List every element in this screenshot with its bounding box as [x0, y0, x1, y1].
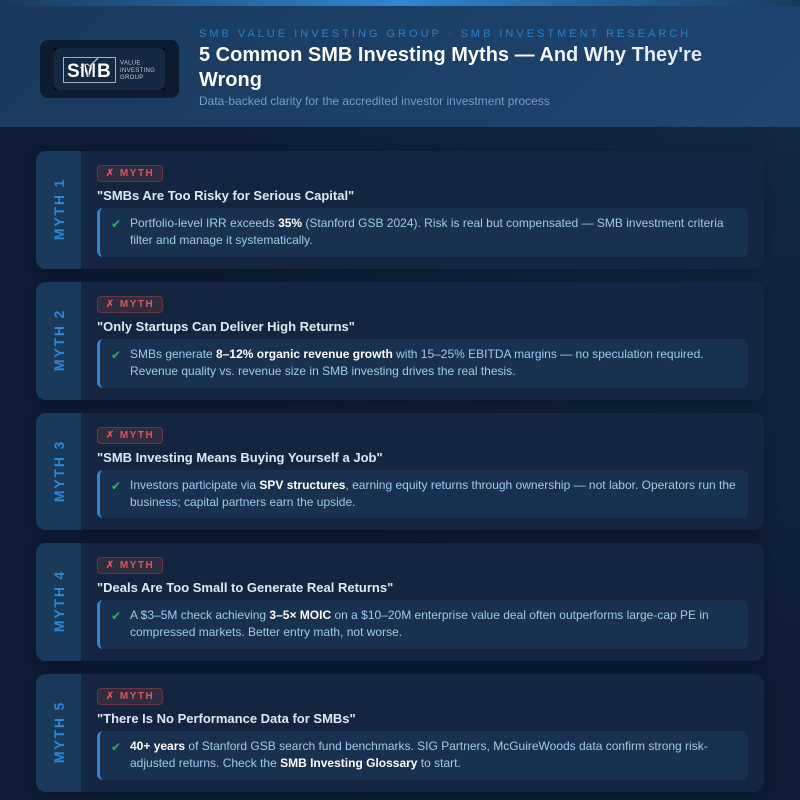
myth 4 rebuttal: ✔ [111, 609, 121, 623]
myth 3 rebuttal: ✔ [111, 479, 121, 493]
myth 1 rebuttal: Portfolio-level IRR exceeds 35% (Stanford GSB 2024). Risk is real but compensated — SMB investment criteria filter and manage it systematically. [130, 216, 724, 247]
myth 2 rebuttal: SMBs generate 8–12% organic revenue growth with 15–25% EBITDA margins — no speculation required. Revenue quality vs. revenue size in SMB investing drives the real thesis. [130, 347, 704, 378]
myth 3 rebuttal: Investors participate via SPV structures, earning equity returns through ownership — not labor. Operators run the business; capital partners earn the upside. [130, 478, 736, 509]
eyebrow: SMB VALUE INVESTING GROUP · SMB INVESTMENT RESEARCH [199, 28, 691, 40]
logo: S [67, 61, 80, 82]
myth 3 rebuttal [97, 470, 748, 518]
myth 1 rebuttal: ✔ [111, 217, 121, 231]
subtitle: Data-backed clarity for the accredited investor investment process [199, 94, 550, 108]
myth 4 tab: MYTH 4 [50, 570, 66, 632]
myth 4 rebuttal [97, 600, 748, 649]
logo: GROUP [120, 75, 144, 81]
panel: myth 5 [36, 674, 764, 792]
panel: myth 3 [36, 413, 764, 530]
myth 4 statement: "Deals Are Too Small to Generate Real Returns" [97, 580, 393, 595]
logo: M [80, 61, 96, 82]
myth 2 tab: MYTH 2 [50, 309, 66, 371]
myth 4 rebuttal: A $3–5M check achieving 3–5× MOIC on a $10–20M enterprise value deal often outperforms large-cap PE in compressed markets. Better entry math, not worse. [130, 608, 709, 639]
header [0, 0, 800, 127]
panel: myth 2 [36, 282, 764, 400]
myth 3 badge: ✗ MYTH [106, 430, 154, 441]
myth 3 statement: "SMB Investing Means Buying Yourself a Job" [97, 450, 383, 465]
myth 5 badge [97, 688, 163, 705]
myth 3 tab [36, 413, 81, 530]
myth 5 statement: "There Is No Performance Data for SMBs" [97, 711, 356, 726]
myth 4 badge: ✗ MYTH [106, 560, 154, 571]
myth 1 badge: ✗ MYTH [106, 168, 154, 179]
myth 4 badge [97, 557, 163, 574]
myth 2 badge: ✗ MYTH [106, 299, 154, 310]
panel: myth 1 [36, 151, 764, 269]
myth 2 rebuttal [97, 339, 748, 388]
panel: myth 4 [36, 543, 764, 661]
logo: VALUE [120, 60, 141, 66]
title: 5 Common SMB Investing Myths — And Why They're Wrong [199, 44, 702, 91]
myth 5 rebuttal: 40+ years of Stanford GSB search fund benchmarks. SIG Partners, McGuireWoods data confirm strong risk-adjusted returns. Check the SMB Investing Glossary to start. [130, 739, 708, 770]
top accent bar [0, 0, 800, 6]
myth 5 rebuttal [97, 731, 748, 780]
myth 2 badge [97, 296, 163, 313]
myth 1 tab: MYTH 1 [50, 178, 66, 240]
myth 1 tab [36, 151, 81, 269]
myth 4 tab [36, 543, 81, 661]
myth 5 tab [36, 674, 81, 792]
myth 5 tab: MYTH 5 [50, 701, 66, 763]
myth 3 badge [97, 427, 163, 444]
logo: B [97, 61, 111, 82]
myth 1 statement: "SMBs Are Too Risky for Serious Capital" [97, 188, 354, 203]
myth 2 statement: "Only Startups Can Deliver High Returns" [97, 319, 355, 334]
myth 1 rebuttal [97, 208, 748, 257]
logo [40, 40, 179, 98]
myth 5 badge: ✗ MYTH [106, 691, 154, 702]
myth 3 tab: MYTH 3 [50, 439, 66, 502]
myth 2 rebuttal: ✔ [111, 348, 121, 362]
myth 5 rebuttal: ✔ [111, 740, 121, 754]
myth 2 tab [36, 282, 81, 400]
logo: INVESTING [120, 68, 155, 74]
myth 1 badge [97, 165, 163, 182]
